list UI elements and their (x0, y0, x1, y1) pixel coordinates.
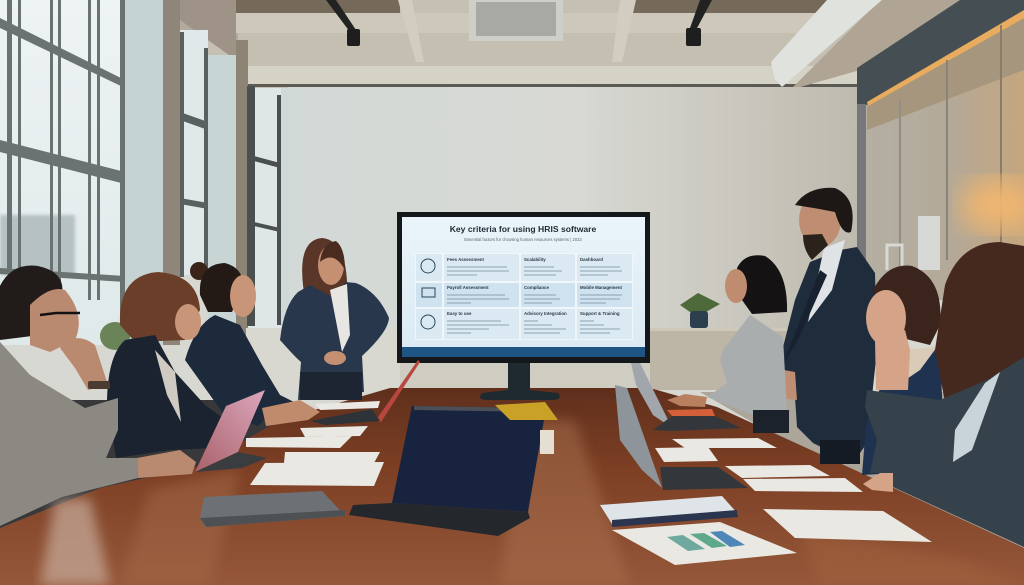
slide table grid: Scalability (524, 257, 546, 262)
slide table grid: Compliance (524, 285, 549, 290)
slide table grid: Support & Training (580, 311, 620, 316)
pink laptop left (195, 390, 267, 472)
ceiling spot lights (326, 0, 712, 46)
seated woman with curly hair (107, 272, 226, 458)
right seated woman dark hair (862, 266, 945, 475)
front dark laptop (349, 406, 546, 536)
slide table grid: Mobile Management (580, 285, 622, 290)
table (0, 388, 1024, 585)
slide table grid: Easy to use (447, 311, 472, 316)
slide table grid: Payroll Assessment (447, 285, 489, 290)
slide table grid: Fees Assessment (447, 257, 484, 262)
monitor screen (402, 217, 645, 347)
ceiling (0, 0, 1024, 90)
standing woman presenter (280, 238, 389, 400)
slide title: Key criteria for using HRIS software (450, 224, 597, 234)
right woman with grey blazer (667, 255, 789, 433)
seated woman with bun (185, 262, 320, 426)
yellow folder and papers on table (495, 402, 715, 454)
right glass wall (857, 0, 1024, 300)
seated man with glasses (0, 266, 196, 526)
slide table grid: Dashboard (580, 257, 603, 262)
slide subtitle: Essential factors for choosing human resources systems | 2023 (464, 237, 582, 242)
monitor (397, 212, 650, 400)
plant on cabinet (680, 293, 720, 328)
right standing man (773, 188, 877, 464)
silver laptop centre-right (615, 385, 748, 490)
documents (246, 401, 932, 565)
slide table grid: Advisory Integration (524, 311, 567, 316)
small plant on left sill (100, 322, 130, 350)
shadows behind the table edge (0, 392, 1024, 560)
foreground right woman (863, 242, 1024, 547)
bar chart on paper (667, 531, 745, 551)
left windows and pillars (0, 0, 290, 345)
monitor stand (480, 360, 560, 400)
low cabinet behind the speakers (246, 328, 790, 390)
notebook (600, 496, 738, 527)
slide table grid (415, 253, 633, 340)
grey closed laptop (200, 491, 345, 527)
silver laptop far right (631, 363, 741, 431)
red laptop centre-left (310, 360, 420, 425)
back wall (288, 87, 858, 332)
monitor bezel (397, 212, 650, 363)
